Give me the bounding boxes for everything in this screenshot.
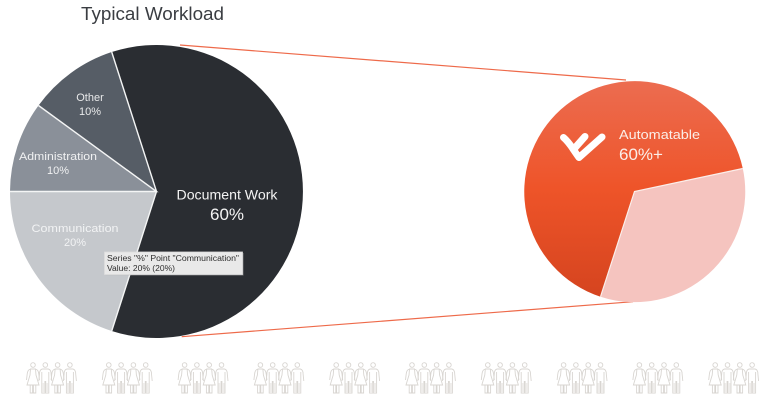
connector line: bottom [182,302,633,337]
icon: check logo [564,136,602,158]
label: document work: Document Work [176,186,279,202]
slice: other [38,52,156,192]
slice: remainder [600,168,745,302]
tooltip: Series "%" Point "Communication" [107,254,239,263]
people icon row [26,363,759,393]
slice: administration [10,106,156,192]
label: automatable: Automatable [619,127,700,142]
tooltip: Value: 20% (20%) [107,264,175,273]
chart: automatable pie [524,81,745,302]
label: other: 10% [79,106,101,118]
tooltip [104,252,244,276]
label: document work: 60% [210,205,244,224]
connector line: top [180,45,626,80]
title: Typical Workload [81,3,224,24]
slice: automatable [524,81,743,297]
label: administration: Administration [19,151,97,163]
label: administration: 10% [47,165,69,177]
label: automatable: 60%+ [619,145,663,164]
label: communication: 20% [64,237,86,249]
chart: typical workload pie [10,45,303,338]
label: communication: Communication [32,223,118,235]
slice: document work [112,45,303,338]
label: other: Other [76,92,104,104]
slice: communication [10,192,156,331]
